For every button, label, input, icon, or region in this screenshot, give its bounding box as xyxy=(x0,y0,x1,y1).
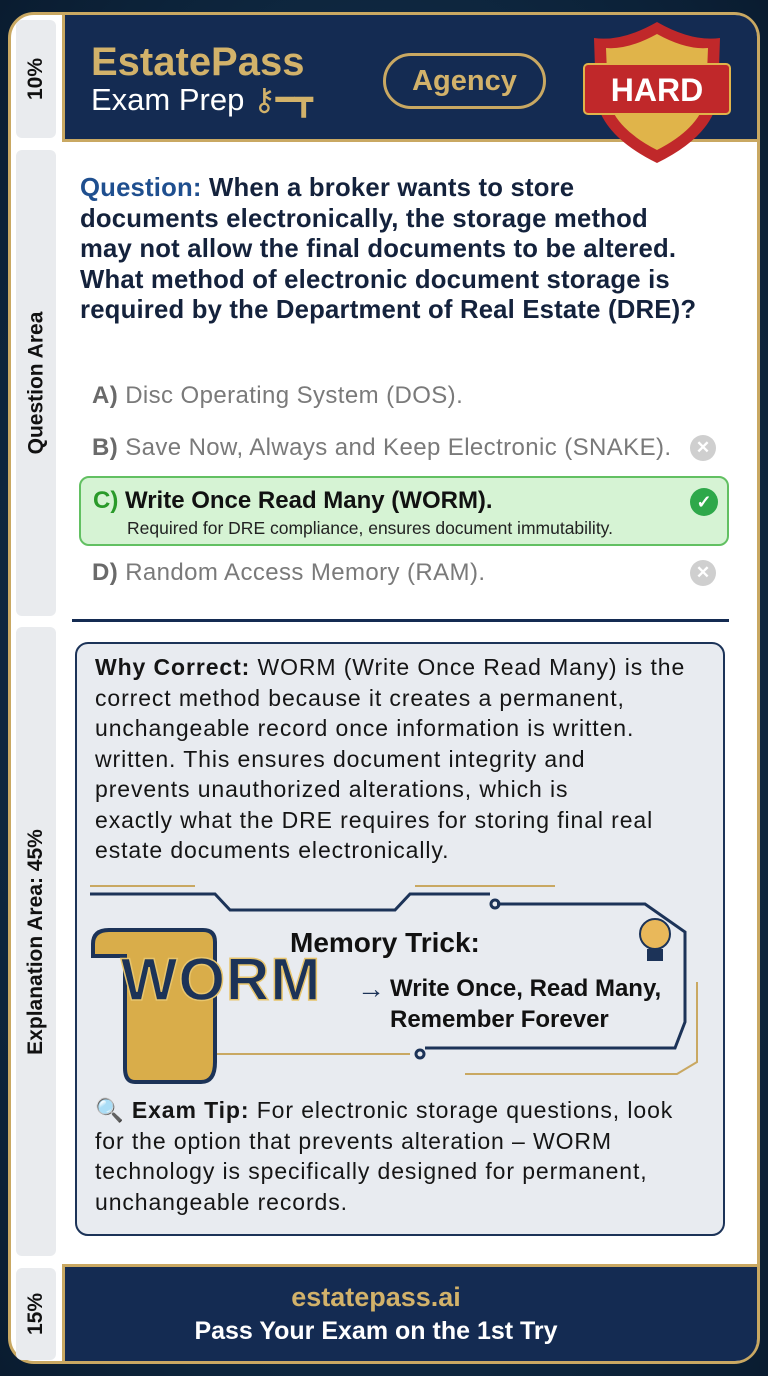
logo: Exam Prep ⚷━┳ xyxy=(91,82,313,117)
label: explanation area xyxy=(16,627,56,1256)
memory trick graphic: Memory Trick: xyxy=(290,927,480,958)
why correct text: prevents unauthorized alterations, which is xyxy=(95,776,568,802)
exam tip: technology is specifically designed for permanent, xyxy=(95,1158,648,1184)
why correct text: exactly what the DRE requires for storing final real xyxy=(95,806,653,832)
why correct text: unchangeable record once information is written. xyxy=(95,715,634,741)
icon: wrong B: ✕ xyxy=(696,438,710,457)
question text: Question: When a broker wants to store xyxy=(80,174,574,202)
question text: may not allow the final documents to be altered. xyxy=(80,235,676,263)
explanation box xyxy=(75,642,725,1236)
why correct text: Why Correct: WORM (Write Once Read Many) is the xyxy=(95,654,685,680)
label: 15% xyxy=(16,1268,56,1360)
memory trick graphic: Write Once, Read Many, xyxy=(390,975,661,1002)
option C correct: C) Write Once Read Many (WORM). xyxy=(93,487,493,514)
label: 15%: 15% xyxy=(24,1293,47,1335)
question text: What method of electronic document storage is xyxy=(80,266,670,294)
memory trick graphic xyxy=(90,885,698,1084)
exam tip: for the option that prevents alteration – WORM xyxy=(95,1128,612,1154)
memory trick graphic: WORM xyxy=(121,946,321,1013)
label: question area xyxy=(16,150,56,616)
logo xyxy=(91,40,314,118)
difficulty shield: HARD xyxy=(611,72,703,108)
question text xyxy=(80,174,696,324)
footer: Pass Your Exam on the 1st Try xyxy=(194,1317,558,1345)
option B: B) Save Now, Always and Keep Electronic (SNAKE). xyxy=(92,434,671,461)
label: 10%: 10% xyxy=(24,58,47,100)
icon: wrong B xyxy=(690,435,716,461)
label: explanation area: Explanation Area: 45% xyxy=(24,829,47,1054)
category pill xyxy=(383,53,546,109)
bulb xyxy=(640,919,670,949)
icon: wrong D xyxy=(690,560,716,586)
label: question area: Question Area xyxy=(24,312,47,454)
exam tip: unchangeable records. xyxy=(95,1188,348,1214)
scroll xyxy=(93,930,215,1082)
footer: estatepass.ai xyxy=(291,1282,461,1312)
question text: required by the Department of Real Estate (DRE)? xyxy=(80,296,696,324)
logo: EstatePass xyxy=(91,40,304,84)
why correct text: correct method because it creates a permanent, xyxy=(95,684,625,710)
exam tip: 🔍 Exam Tip: For electronic storage questions, look xyxy=(95,1097,673,1123)
header panel xyxy=(62,15,757,142)
option C correct: Required for DRE compliance, ensures document immutability. xyxy=(127,518,613,538)
why correct text: estate documents electronically. xyxy=(95,837,449,863)
exam tip xyxy=(95,1097,673,1215)
icon: check: ✓ xyxy=(696,492,712,512)
option A: A) Disc Operating System (DOS). xyxy=(92,382,463,409)
why correct text xyxy=(95,654,685,863)
why correct text: written. This ensures document integrity and xyxy=(95,746,585,772)
memory trick graphic: Remember Forever xyxy=(390,1006,609,1033)
footer xyxy=(62,1264,757,1361)
difficulty shield xyxy=(583,22,731,163)
icon: wrong D: ✕ xyxy=(696,563,710,582)
icon: check xyxy=(690,488,718,516)
option D: D) Random Access Memory (RAM). xyxy=(92,559,485,586)
option C correct xyxy=(79,476,729,546)
label: 10% xyxy=(16,20,56,138)
question text: documents electronically, the storage method xyxy=(80,204,648,232)
category pill: Agency xyxy=(412,65,517,97)
memory trick graphic: → xyxy=(357,973,385,1004)
